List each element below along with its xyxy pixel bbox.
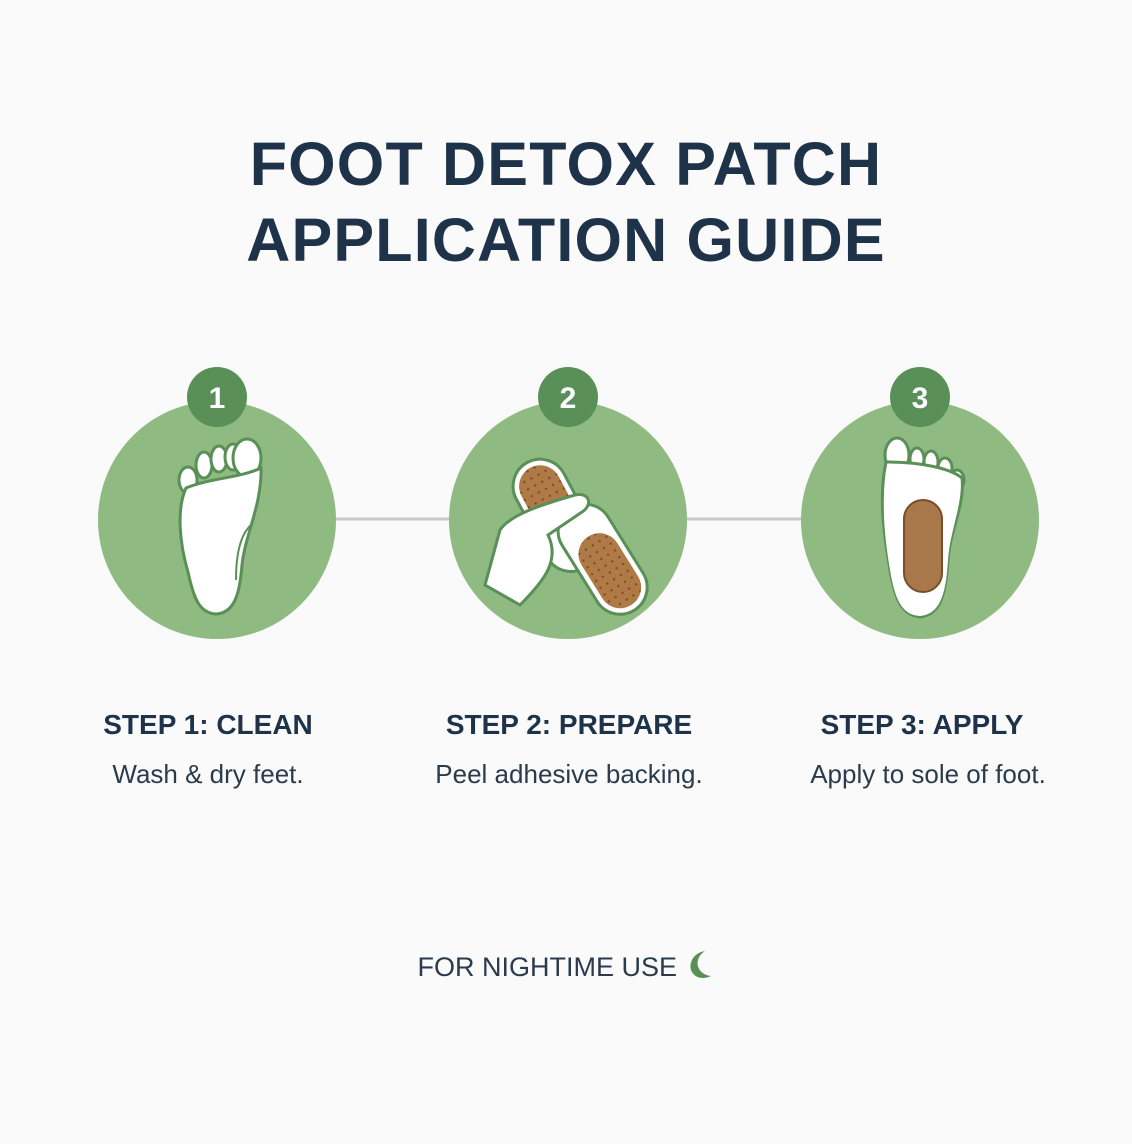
- number badges: 3: [912, 382, 928, 415]
- connector lines: [335, 518, 802, 520]
- steps illustration: [98, 367, 1039, 639]
- footer note: FOR NIGHTIME USE: [417, 952, 677, 982]
- step 2 text: Peel adhesive backing.: [435, 759, 703, 789]
- step 2 heading: STEP 2: PREPARE: [446, 709, 692, 740]
- title: APPLICATION GUIDE: [246, 206, 886, 274]
- number badges: 2: [560, 382, 576, 415]
- number badges: [187, 367, 950, 427]
- step 3 text: Apply to sole of foot.: [810, 759, 1046, 789]
- step 2 circle: hand peeling patch: [449, 401, 687, 639]
- step 3 circle: foot with patch: [801, 401, 1039, 639]
- title: FOOT DETOX PATCH: [250, 130, 882, 198]
- number badges: 1: [209, 382, 225, 415]
- step 1 circle: foot: [98, 401, 336, 639]
- title: [246, 130, 886, 274]
- step 1 heading: STEP 1: CLEAN: [103, 709, 313, 740]
- step 1 text: Wash & dry feet.: [112, 759, 304, 789]
- step 3 heading: STEP 3: APPLY: [821, 709, 1023, 740]
